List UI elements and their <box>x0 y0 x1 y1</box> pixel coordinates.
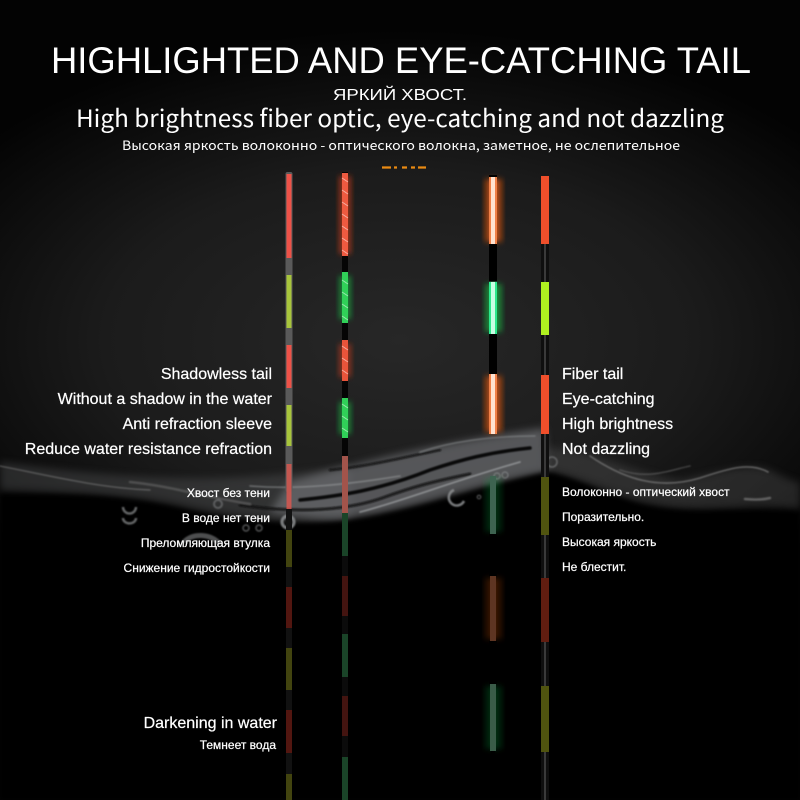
air bubbles under the surface <box>123 457 557 544</box>
darkening in water label <box>144 715 278 752</box>
right feature labels in English <box>562 366 673 458</box>
left feature labels in English: Without a shadow in the water <box>58 391 273 408</box>
right feature labels in Russian: Не блестит. <box>562 560 626 574</box>
left feature labels in English <box>25 366 273 458</box>
float tail 2: glowing red and green fibre <box>335 172 355 800</box>
right feature labels in Russian: Поразительно. <box>562 510 644 524</box>
left feature labels in Russian <box>124 486 270 575</box>
left feature labels in Russian: В воде нет тени <box>182 511 270 525</box>
left feature labels in Russian: Преломляющая втулка <box>141 536 270 550</box>
darkening in water label: Темнеет вода <box>200 738 276 752</box>
right feature labels in English: Fiber tail <box>562 366 623 383</box>
right feature labels in Russian: Волоконно - оптический хвост <box>562 485 730 499</box>
russian title: ЯРКИЙ ХВОСТ. <box>333 86 467 104</box>
subtitle: High brightness fiber optic, eye-catching and not dazzling <box>76 99 724 134</box>
right feature labels in Russian <box>562 485 730 574</box>
left feature labels in English: Anti refraction sleeve <box>123 416 272 433</box>
darkening in water label: Darkening in water <box>144 715 278 732</box>
right feature labels in English: High brightness <box>562 416 673 433</box>
right feature labels in English: Eye-catching <box>562 391 654 408</box>
float tail 1: matte red and lime segments <box>286 172 292 800</box>
left feature labels in Russian: Снижение гидростойкости <box>124 561 270 575</box>
left feature labels in Russian: Хвост без тени <box>187 486 270 500</box>
decorative orange dash divider <box>382 166 426 169</box>
float tail 4: matte red and lime solid segments <box>541 176 549 800</box>
right feature labels in English: Not dazzling <box>562 441 650 458</box>
right feature labels in Russian: Высокая яркость <box>562 535 656 549</box>
float tail 3: bright orange and green fibre <box>481 175 506 781</box>
left feature labels in English: Shadowless tail <box>161 366 272 383</box>
russian subtitle: Высокая яркость волоконно - оптического волокна, заметное, не ослепительное <box>122 135 680 154</box>
left feature labels in English: Reduce water resistance refraction <box>25 441 272 458</box>
water surface wave <box>0 428 800 800</box>
title: HIGHLIGHTED AND EYE-CATCHING TAIL <box>51 40 751 81</box>
